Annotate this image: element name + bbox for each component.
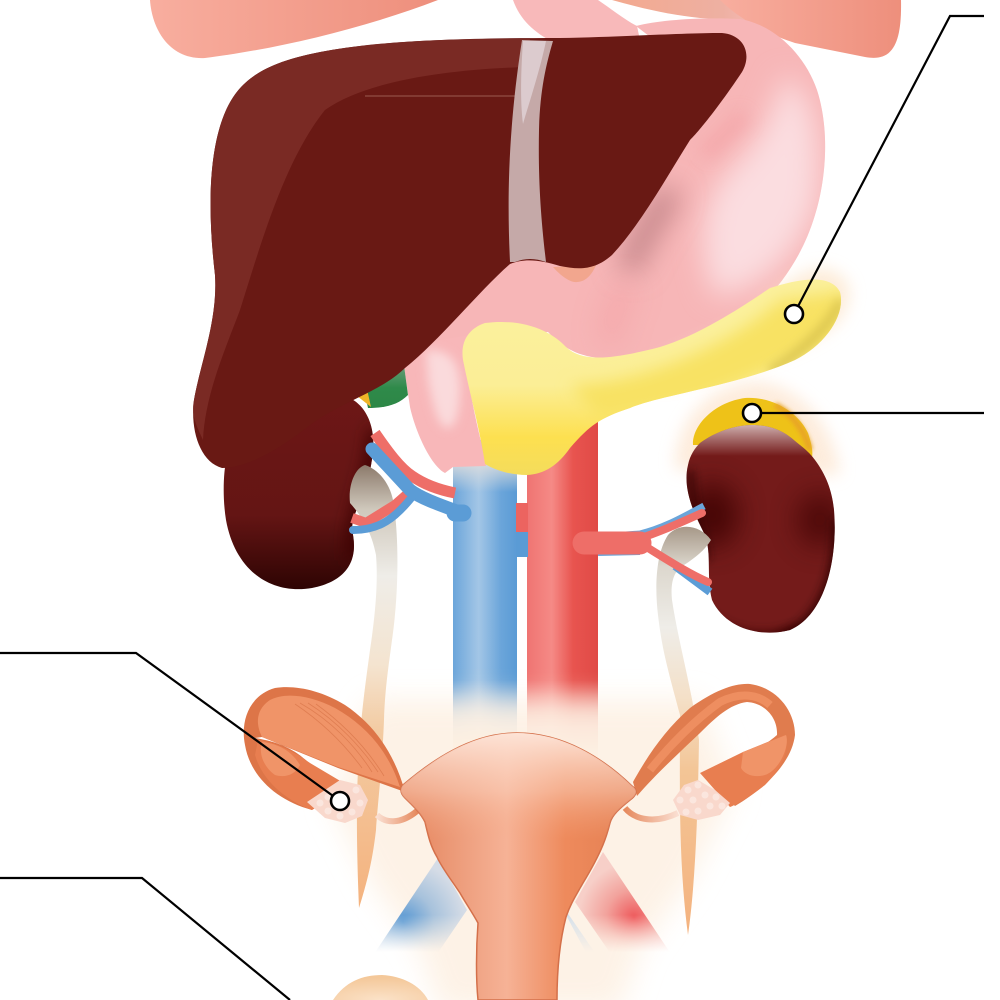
pelvic glow	[330, 700, 735, 1000]
right ovary	[625, 780, 730, 820]
right-side kidney (image left)	[224, 395, 376, 589]
left fallopian tube	[244, 687, 405, 810]
stomach	[404, 0, 825, 360]
leader line: adrenal gland	[743, 404, 984, 422]
renal vessels	[352, 433, 710, 592]
liver	[193, 33, 746, 468]
inferior vena cava	[453, 440, 517, 750]
bladder	[333, 975, 428, 1000]
gallbladder	[347, 358, 408, 408]
left-side kidney (image right)	[686, 425, 835, 633]
right fallopian tube	[633, 684, 795, 807]
leader line: bottom	[0, 878, 290, 1000]
falciform ligament	[509, 40, 553, 262]
leader line: pancreas	[785, 16, 984, 323]
duodenum	[403, 335, 486, 473]
left ovary	[307, 780, 417, 823]
pancreas	[462, 279, 850, 475]
ureters	[350, 465, 711, 935]
top lung and diaphragm shapes	[150, 0, 901, 58]
aorta	[527, 420, 598, 760]
iliac vessels	[378, 852, 666, 949]
adrenal gland glow	[675, 382, 840, 475]
uterus	[401, 733, 636, 1000]
pancreas glow	[640, 268, 850, 385]
left adrenal gland	[693, 398, 812, 458]
leader line: ovary	[0, 653, 349, 810]
